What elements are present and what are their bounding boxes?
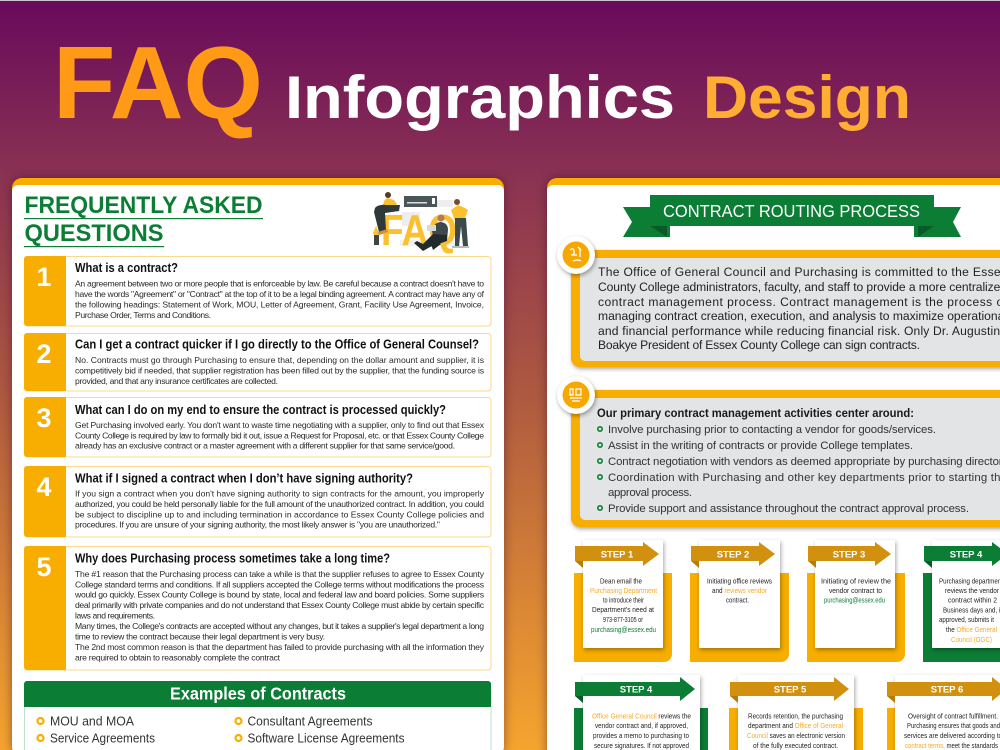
intro paragraph: County College administrators, faculty, and staff to provide a more centralized [598, 280, 1000, 294]
activities list: Assist in the writing of contracts or provide College templates. [608, 440, 913, 452]
activities list: Coordination with Purchasing and other key departments prior to starting the [608, 472, 1000, 484]
answer: procedures. If you are unsure of your signing authority, the most likely answer is "you are unauthorized." [75, 520, 440, 530]
step 6 card: STEP 6 [931, 684, 963, 696]
step 1 card: 973-877-3105 or [603, 615, 643, 624]
step 4 card bottom row: vendor contract and, if approved, [595, 721, 688, 730]
step 1 card: Department's need at [592, 605, 654, 614]
examples header [24, 681, 491, 707]
answer: The #1 reason that the Purchasing process can take a while is that the supplier refuses to agree to Essex County [75, 569, 485, 579]
panel: contract routing process [547, 178, 1000, 750]
activities heading: Our primary contract management activities center around: [597, 407, 914, 420]
intro callout box [557, 236, 1000, 367]
step 6 card [887, 675, 1000, 750]
step 4 card bottom row: provides a memo to purchasing to [593, 731, 689, 740]
intro paragraph: managing contract creation, execution, and analysis to maximize operational [598, 309, 1000, 323]
intro paragraph: contract management process. Contract management is the process of [598, 295, 1000, 309]
answer [75, 488, 485, 530]
FAQ card 2 [24, 333, 491, 391]
ribbon heading [623, 195, 961, 237]
step 2 card: Initiating office reviews [707, 576, 772, 586]
heading: frequently asked questions: FREQUENTLY ASKED [24, 192, 262, 219]
number block [24, 256, 66, 326]
step 4 card bottom row: Office General Council reviews the [592, 712, 691, 720]
step 4 card bottom row [574, 675, 708, 750]
FAQ card 1 [24, 256, 491, 326]
number block [24, 546, 66, 670]
step 2 card: STEP 2 [717, 550, 749, 560]
answer: time to review the contract because their legal department is very busy. [75, 632, 325, 642]
question: What can I do on my end to ensure the contract is processed quickly? [75, 403, 446, 417]
answer: deal primarily with private companies and do not understand that Essex County College must abide by certain specific [75, 600, 485, 610]
examples of contracts box [24, 681, 491, 750]
step 4 card top row: contract within 2 [948, 596, 997, 604]
answer: No. Contracts must go through Purchasing to ensure that, depending on the dollar amount and supplier, it is [75, 355, 484, 365]
intro paragraph: and financial performance while reducing financial risk. Only Dr. Augustine [598, 324, 1000, 338]
answer: the following headings: Statement of Work, MOU, Letter of Agreement, Grant, Facility Use Agreement, Invoice, [75, 300, 484, 310]
question: Why does Purchasing process sometimes take a long time? [75, 552, 390, 566]
activities list: approval process. [608, 487, 692, 499]
icon: document badge [557, 376, 595, 414]
step 3 card [807, 540, 905, 662]
step 1 card: Purchasing Department [590, 586, 657, 595]
step 4 card top row: STEP 4 [950, 550, 983, 560]
answer [75, 278, 485, 320]
step 4 card top row [923, 540, 1000, 662]
intro paragraph: Boakye President of Essex County College can sign contracts. [598, 338, 920, 352]
step 1 card: to introduce their [603, 596, 644, 604]
answer: already has an exclusive contract or a master agreement with a different supplier for that same service/good. [75, 441, 455, 451]
FAQ card 4 [24, 466, 491, 537]
FAQ card 5 [24, 546, 491, 670]
step 5 card: Council saves an electronic version [747, 731, 845, 740]
ribbon heading: CONTRACT ROUTING PROCESS [663, 201, 920, 221]
step 1 card: STEP 1 [601, 550, 634, 560]
answer: have the words "Agreement" or "Contract" at the top of it to be a legal binding agreement. A contract may have any of [75, 289, 485, 299]
list left column: MOU and MOA [50, 714, 134, 728]
number block [24, 333, 66, 391]
step 3 card: STEP 3 [833, 550, 865, 560]
step 1 card: purchasing@essex.edu [591, 625, 656, 634]
answer: Get Purchasing involved early. You don't want to waste time negotiating with a supplier, only to find out that Essex [75, 420, 485, 430]
answer: provided, and that any insurance certificates are collected. [75, 376, 278, 386]
step 4 card bottom row: secure signatures. If not approved [594, 741, 689, 750]
number block [24, 397, 66, 457]
icon: FAQ illustration with people [373, 192, 469, 255]
answer: authorized, you could be held personally liable for the full amount of the unauthorized contract. In addition, you could [75, 499, 484, 509]
answer: be subject to discipline up to and including termination in accordance to Essex County College policies and [75, 509, 484, 519]
answer: College standard terms and conditions. If all suppliers accepted the College terms without modifications the process [75, 579, 484, 589]
answer: Many times, the College's contracts are accepted without any changes, but it takes a supplier's legal department a long [75, 621, 484, 631]
step 3 card: Initiating of review the [821, 576, 891, 586]
answer: are required to obtain to reasonably complete the contract [75, 652, 281, 662]
number: 5 [36, 552, 52, 582]
activities list: Provide support and assistance throughout the contract approval process. [608, 503, 969, 515]
answer: Purchase Order, Terms and Conditions. [75, 310, 211, 320]
answer: If you sign a contract when you don't have signing authority to sign contracts for the amount, you improperly [75, 488, 485, 498]
step 2 card: contract. [726, 596, 749, 604]
list right column: Consultant Agreements [248, 714, 373, 728]
step 3 card: vendor contract to [829, 586, 882, 595]
number: 3 [36, 403, 52, 433]
answer: The 2nd most common reason is that the department has failed to provide purchasing with all the information they [75, 642, 485, 652]
number: 1 [36, 262, 52, 292]
list left column [38, 714, 155, 750]
step 5 card: Records retention, the purchasing [748, 712, 843, 720]
heading: frequently asked questions: QUESTIONS [24, 220, 164, 247]
answer: County College is required by law to formally bid it out, issue a Request for Proposal, etc. or that Essex County College [75, 430, 484, 440]
step 1 card [574, 540, 672, 662]
step 4 card top row: Council (OGC) [951, 635, 992, 644]
title word: FAQ: FAQ [53, 25, 263, 140]
step 1 card: Dean email the [600, 576, 642, 586]
step 5 card: department and Office of General [748, 721, 843, 730]
list left column: Service Agreements [50, 730, 155, 746]
icon: signature badge [557, 236, 595, 274]
step 4 card bottom row: STEP 4 [620, 684, 653, 696]
answer: would go quickly. Essex County College is bound by state, local and federal law and board policies. Some suppliers [74, 589, 484, 599]
intro paragraph: The Office of General Council and Purchasing is committed to the Essex [598, 265, 1000, 279]
heading: frequently asked questions [24, 192, 263, 247]
activities list [598, 424, 1000, 515]
question: What if I signed a contract when I don’t have signing authority? [75, 472, 413, 486]
panel background [547, 178, 1000, 750]
activities list: Involve purchasing prior to contacting a vendor for goods/services. [608, 424, 936, 436]
number: 2 [36, 339, 52, 369]
step 5 card: of the fully executed contract. [753, 741, 838, 750]
title word: Design: Design [703, 64, 911, 131]
answer [75, 420, 485, 451]
answer: laws and requirements. [75, 610, 155, 620]
step 5 card: STEP 5 [774, 684, 807, 696]
icon: FAQ illustration with people: FAQ [381, 206, 457, 255]
activities callout box [557, 376, 1000, 527]
list right column: Software License Agreements [248, 730, 405, 746]
question: What is a contract? [75, 261, 178, 275]
answer [74, 569, 485, 662]
panel background [12, 178, 504, 750]
activities list: Contract negotiation with vendors as deemed appropriate by purchasing director. [608, 456, 1000, 468]
step 5 card [729, 675, 863, 750]
answer: An agreement between two or more people that is enforceable by law. Be careful because a contract doesn't have to [75, 278, 484, 288]
number block [24, 466, 66, 537]
title word: Infographics: Infographics [285, 64, 675, 131]
panel: frequently asked questions [12, 178, 504, 750]
FAQ card 3 [24, 397, 491, 457]
list right column [236, 714, 405, 750]
title [53, 25, 911, 140]
intro paragraph [598, 265, 1000, 352]
step 2 card: and reviews vendor [712, 586, 767, 595]
question: Can I get a contract quicker if I go directly to the Office of General Counsel? [75, 338, 479, 352]
answer [75, 355, 484, 386]
number: 4 [36, 472, 52, 502]
step 3 card: purchasing@essex.edu [824, 596, 885, 604]
step 2 card [690, 540, 789, 662]
answer: competitively bid if needed, that supplier registration has been filled out by the supplier, that the funding source is [75, 365, 484, 375]
examples heading text: Examples of Contracts [170, 684, 346, 704]
